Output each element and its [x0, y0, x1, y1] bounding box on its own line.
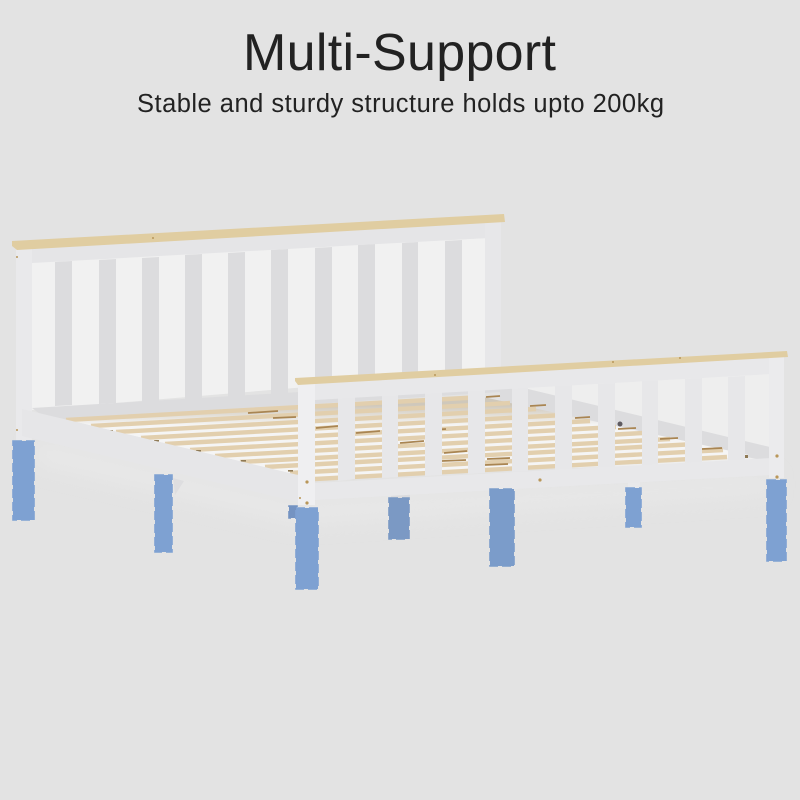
leg 5 [490, 489, 514, 566]
footboard wood cap [295, 351, 788, 385]
headboard [12, 214, 505, 440]
headboard slats [55, 240, 462, 406]
leg 4 [389, 498, 409, 539]
leg 3 [296, 508, 318, 589]
blue support legs [13, 441, 786, 589]
footboard upper rail [315, 357, 771, 400]
footboard lower rail [315, 458, 771, 500]
headboard upper rail [32, 222, 488, 263]
headboard wood cap [12, 214, 505, 250]
leg 7 [767, 480, 786, 561]
headboard lower rail [32, 380, 500, 420]
leg 2 [155, 475, 172, 552]
subtitle: Stable and sturdy structure holds upto 200kg [137, 90, 664, 118]
slat base gaps [68, 397, 749, 480]
title: Multi-Support [243, 24, 557, 82]
near side rail [22, 409, 298, 502]
far side rail [500, 382, 770, 462]
leg 6 [626, 488, 641, 527]
footboard left post [298, 384, 315, 505]
dark bolt on far rail [618, 422, 622, 426]
soft glow beneath bed [36, 442, 771, 522]
footboard slats [338, 376, 745, 481]
headboard left post [16, 248, 32, 440]
footboard right post [769, 357, 784, 478]
brass bolts [16, 237, 779, 505]
headboard right post [485, 221, 501, 372]
light area seen through footboard [501, 362, 771, 470]
wooden bed slats [66, 397, 727, 479]
leg 3 bracket [289, 506, 297, 518]
leg 1 [13, 441, 34, 520]
knots along near rail [108, 430, 748, 472]
headboard opening [32, 238, 486, 410]
footboard [16, 237, 788, 505]
back legs [173, 478, 640, 500]
wood grain knots [248, 396, 722, 465]
